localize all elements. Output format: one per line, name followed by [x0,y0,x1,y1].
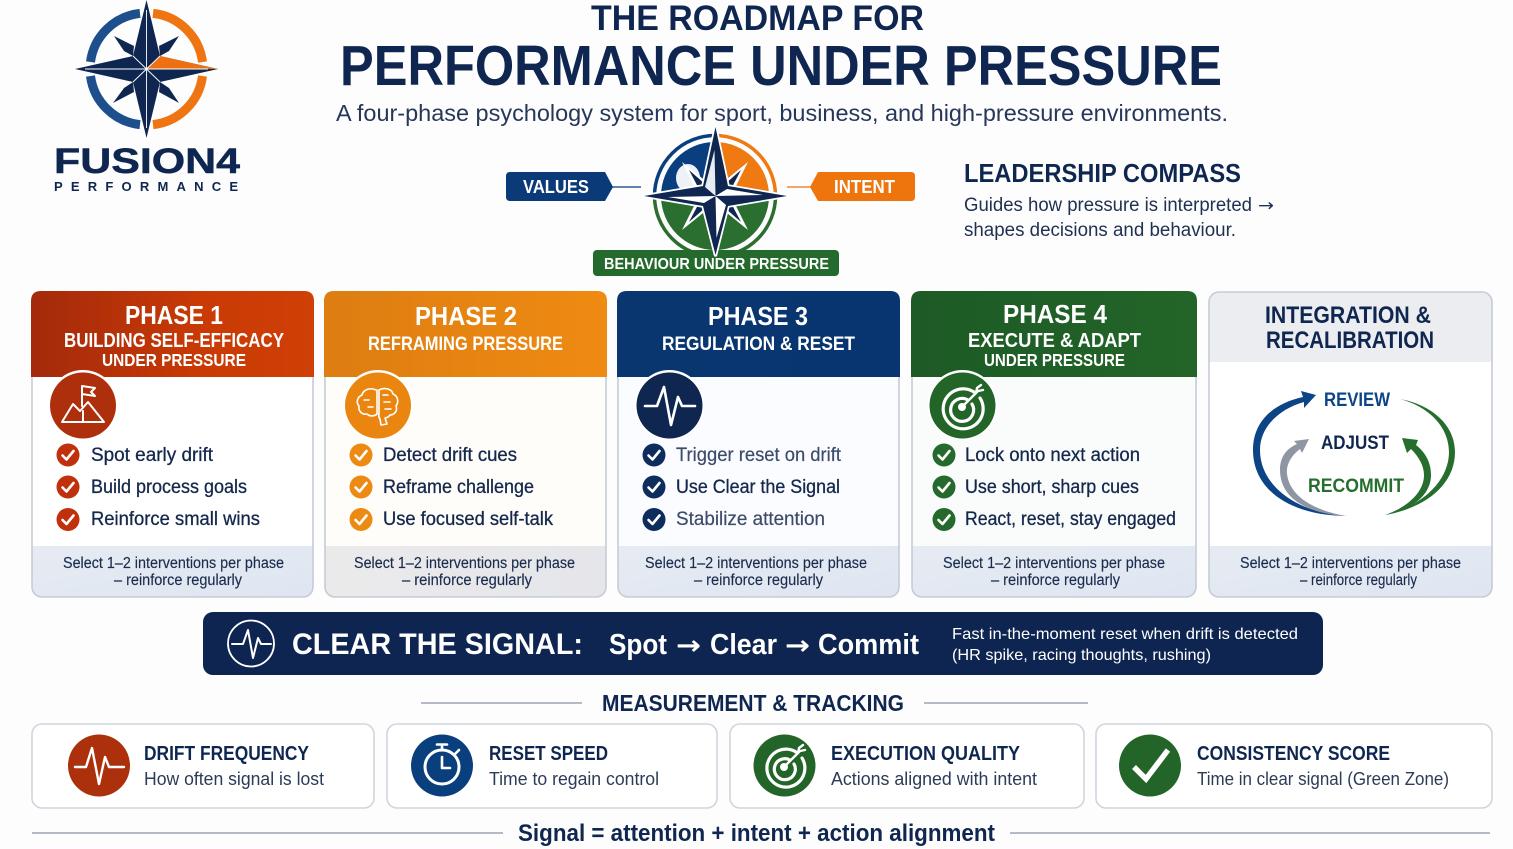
icon: brain [343,370,413,440]
integration footer [1209,546,1492,597]
arrow: green inner [1385,438,1431,515]
metric: reset speed [387,724,717,808]
footer formula: Signal = attention + intent + action alignment [518,820,995,847]
phase 4 header: EXECUTE & ADAPT [968,330,1141,352]
phase 1 checklist: Build process goals [91,477,247,498]
icon: mountain with flag [48,370,118,440]
label: intent: INTENT [834,177,895,197]
icon: stopwatch [411,734,473,796]
phase 1 checklist: Reinforce small wins [91,509,260,530]
leadership compass text: shapes decisions and behaviour. [964,220,1236,241]
phase 2 header [324,291,607,377]
phase 2 checklist [350,444,553,531]
icon: heartbeat [634,370,704,440]
phase 3 checklist: Trigger reset on drift [676,445,842,466]
phase 1 header: UNDER PRESSURE [102,350,246,370]
arrow: blue outer [1253,391,1345,516]
logo wordmark: FUSION4 [54,142,241,181]
banner: clear the signal [203,612,1323,675]
phase 2 checklist: Detect drift cues [383,445,517,466]
integration footer: Select 1–2 interventions per phase [1240,555,1461,572]
phase 4 header: UNDER PRESSURE [984,350,1125,370]
phase 3 footer: Select 1–2 interventions per phase [645,555,867,572]
leadership compass text: Guides how pressure is interpreted [964,195,1252,216]
phase 4 footer: – reinforce regularly [991,572,1120,589]
phase 2 footer: – reinforce regularly [402,572,532,589]
banner description [952,626,1298,664]
label: values [506,172,641,201]
arrow: green outer [1385,399,1455,515]
phase 4 checklist: Lock onto next action [965,445,1140,466]
phase 1 header: PHASE 1 [125,300,223,330]
phase 4 footer: Select 1–2 interventions per phase [943,555,1165,572]
phase 4 header [911,291,1197,377]
phase 3 header: REGULATION & RESET [662,334,855,355]
integration header: RECALIBRATION [1266,327,1434,354]
metric: drift frequency [32,724,374,808]
arrow: gray inner [1280,439,1347,516]
phase 1 checklist [56,444,260,531]
metric: consistency score: Time in clear signal (Green Zone) [1197,769,1449,789]
banner description: Fast in-the-moment reset when drift is detected [952,626,1298,643]
metric: consistency score [1096,724,1492,808]
phase 3 header: PHASE 3 [708,301,808,331]
metric: reset speed: RESET SPEED [489,743,608,765]
phase 4 header: PHASE 4 [1003,299,1108,329]
integration header: INTEGRATION & [1265,302,1431,329]
phase 2 checklist: Use focused self-talk [383,509,553,530]
banner steps: → [785,631,810,661]
panel: phase 3 [617,291,900,597]
integration footer: – reinforce regularly [1300,572,1417,589]
icon: target [928,370,998,440]
phase 1 checklist: Spot early drift [91,445,214,466]
title: PERFORMANCE UNDER PRESSURE [340,34,1222,98]
phase 3 checklist: Stabilize attention [676,509,825,530]
panel: phase 2 [324,291,607,597]
logo: Fusion4 Performance [54,0,241,194]
subtitle: A four-phase psychology system for sport, business, and high-pressure environments. [336,100,1228,126]
metric: execution quality [730,724,1084,808]
integration header [1209,292,1492,362]
leadership compass text [964,158,1274,241]
leadership compass text: LEADERSHIP COMPASS [964,158,1241,188]
heading: measurement and tracking: MEASUREMENT & TRACKING [602,690,904,716]
phase 1 footer: – reinforce regularly [114,572,242,589]
banner heading: CLEAR THE SIGNAL: [292,628,583,661]
phase 2 footer [325,546,606,597]
phase 3 footer [618,546,899,597]
label: intent [787,172,915,201]
phase 4 checklist [932,444,1176,531]
leadership compass graphic [506,127,915,276]
panel: phase 4 [911,291,1197,597]
icon: check [1119,734,1181,796]
label: recommit: RECOMMIT [1308,476,1404,497]
phase 4 checklist: Use short, sharp cues [965,477,1139,498]
badge: behaviour under pressure: BEHAVIOUR UNDER PRESSURE [604,256,829,273]
panel: integration and recalibration [1209,292,1492,597]
label: adjust: ADJUST [1321,433,1389,454]
phase 2 header: REFRAMING PRESSURE [368,334,563,355]
icon: drift pulse [68,734,130,796]
icon: signal pulse [228,620,274,666]
metric: consistency score: CONSISTENCY SCORE [1197,743,1390,765]
phase 1 footer: Select 1–2 interventions per phase [63,555,284,572]
phase 1 footer [32,546,313,597]
cycle diagram [1253,390,1455,516]
phase 4 footer [912,546,1196,597]
metric: drift frequency: DRIFT FREQUENCY [144,743,310,765]
metric: reset speed: Time to regain control [489,769,659,789]
label: review: REVIEW [1324,390,1390,411]
metric: drift frequency: How often signal is lost [144,769,324,789]
logo compass star [75,0,218,138]
banner steps: → [676,631,701,661]
compass star [644,127,787,255]
phase 3 checklist [642,444,842,531]
metric: execution quality: Actions aligned with intent [831,769,1037,789]
label: values: VALUES [523,177,589,197]
phase 2 checklist: Reframe challenge [383,477,534,498]
logo tagline: PERFORMANCE [54,179,238,194]
badge: behaviour under pressure [593,250,839,276]
title [340,0,1222,98]
logo compass ring [90,13,202,125]
banner steps: Commit [818,629,919,661]
phase 3 checklist: Use Clear the Signal [676,477,840,498]
phase 1 header [31,291,314,377]
phase 3 footer: – reinforce regularly [694,572,823,589]
icon: target [754,734,816,796]
banner steps: Spot [609,629,667,661]
phase 4 checklist: React, reset, stay engaged [965,509,1176,530]
leadership compass text: → [1258,196,1274,216]
phase 1 header: BUILDING SELF-EFFICACY [64,330,285,352]
banner steps [609,629,919,661]
phase 2 footer: Select 1–2 interventions per phase [354,555,575,572]
banner steps: Clear [710,629,777,661]
metric: execution quality: EXECUTION QUALITY [831,743,1021,765]
compass quadrants [654,136,776,256]
phase 3 header [617,291,900,377]
title: THE ROADMAP FOR [591,0,924,38]
panel: phase 1 [31,291,314,597]
banner description: (HR spike, racing thoughts, rushing) [952,647,1211,664]
phase 2 header: PHASE 2 [415,301,517,331]
